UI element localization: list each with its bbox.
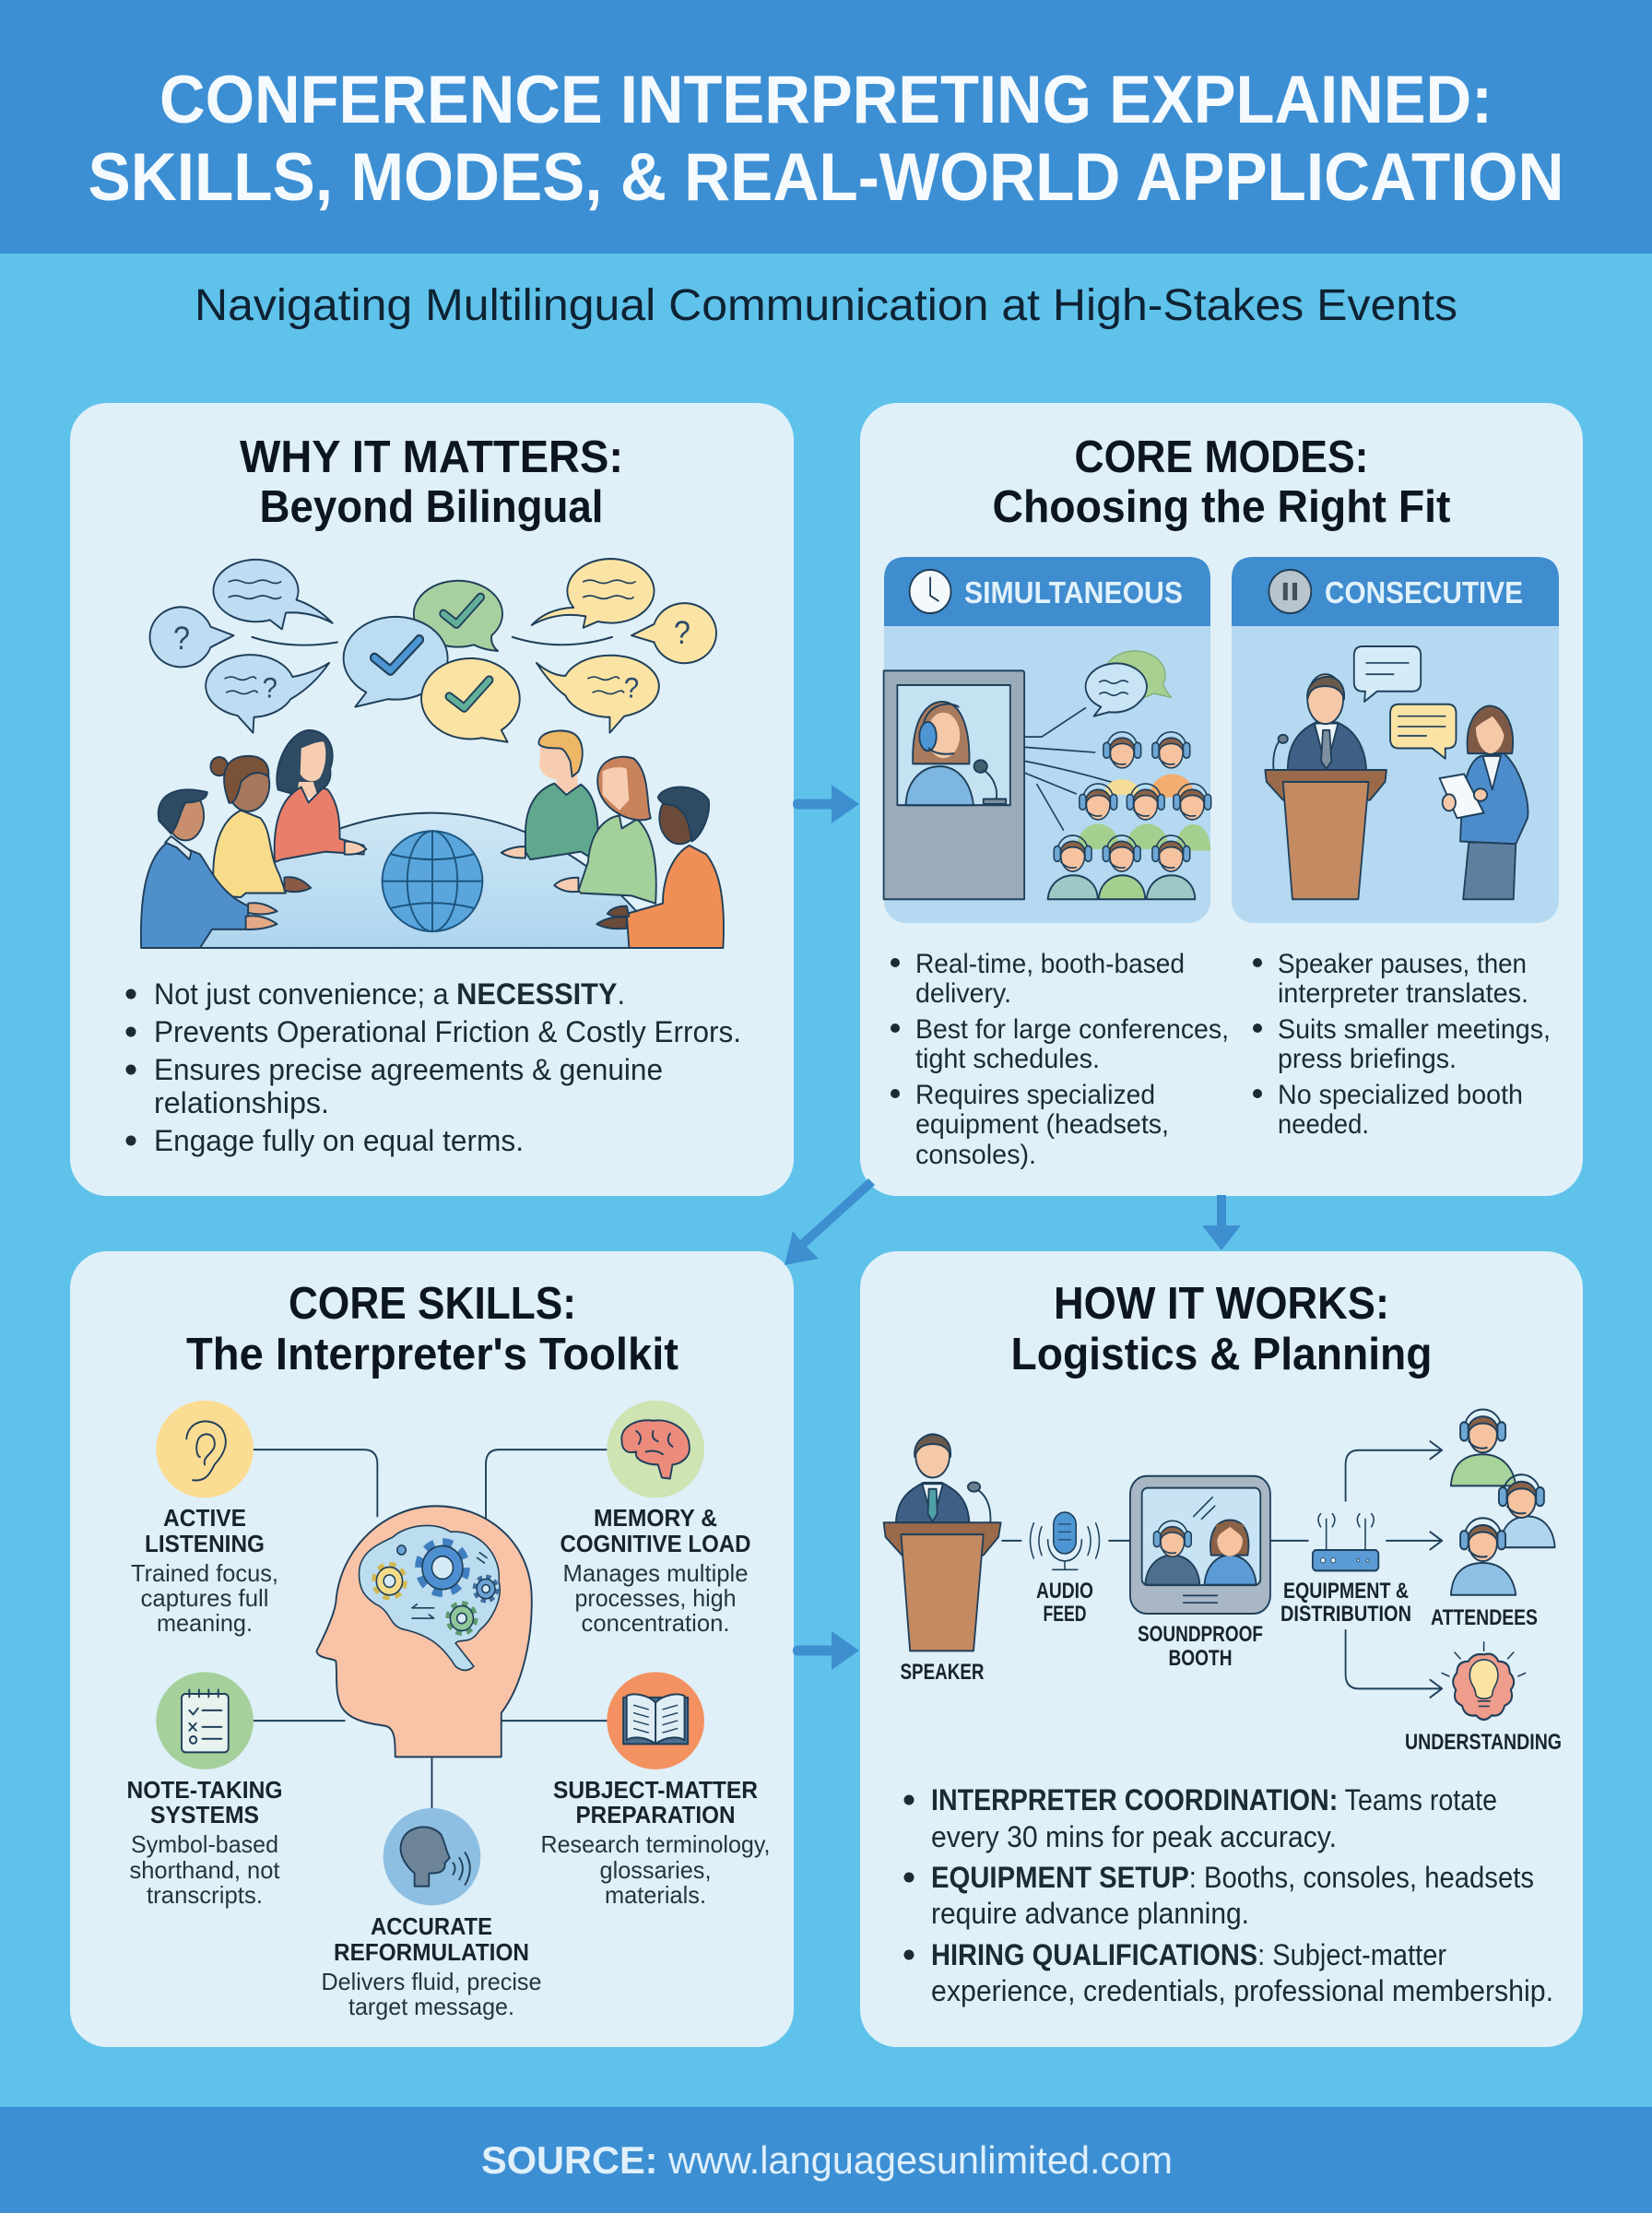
text block: why it matters bullets: Prevents Operational Friction & Costly Errors. bbox=[154, 1015, 741, 1048]
text block: consecutive bullets: Speaker pauses, then bbox=[1278, 949, 1527, 979]
icon: speaker at podium bbox=[884, 1434, 1001, 1651]
heading: why it matters: WHY IT MATTERS: bbox=[240, 432, 623, 482]
diagram: audio signal flow bbox=[884, 1410, 1555, 1720]
skill: memory and cognitive load: processes, high bbox=[575, 1584, 736, 1612]
flow labels: SOUNDPROOF bbox=[1138, 1622, 1263, 1647]
skill: active listening: Trained focus, bbox=[131, 1559, 278, 1587]
flow labels: EQUIPMENT & bbox=[1283, 1579, 1409, 1604]
skill: subject-matter preparation: glossaries, bbox=[599, 1856, 712, 1884]
text block: why it matters bullets: Ensures precise agreements & genuine bbox=[154, 1053, 663, 1086]
skill: note-taking systems: transcripts. bbox=[147, 1881, 263, 1909]
icon: understanding brain with light bulb bbox=[1442, 1642, 1525, 1720]
heading: core modes: Choosing the Right Fit bbox=[992, 482, 1451, 532]
text block: why it matters bullets bbox=[125, 977, 741, 1157]
text block: how it works bullets: INTERPRETER COORDINATION: Teams rotate bbox=[931, 1783, 1497, 1817]
heading: why it matters bbox=[240, 432, 623, 532]
skill: memory and cognitive load bbox=[560, 1504, 750, 1637]
text block: simultaneous bullets: Best for large conferences, bbox=[915, 1014, 1229, 1045]
heading: core skills bbox=[186, 1279, 678, 1379]
skill: accurate reformulation: ACCURATE bbox=[371, 1912, 492, 1940]
skill: memory and cognitive load: concentration. bbox=[581, 1609, 730, 1637]
arrow: core skills to how it works bbox=[793, 1631, 859, 1670]
skill: accurate reformulation: target message. bbox=[348, 1993, 514, 2020]
skill: subject-matter preparation: PREPARATION bbox=[575, 1801, 736, 1828]
table bbox=[200, 813, 663, 948]
panel: why it matters bbox=[70, 403, 794, 1196]
footer source bar bbox=[0, 2107, 1652, 2213]
heading: how it works: HOW IT WORKS: bbox=[1054, 1279, 1389, 1329]
illustration: diverse team around table with speech bubbles: ? bbox=[674, 616, 690, 651]
text block: why it matters bullets: relationships. bbox=[154, 1086, 329, 1119]
icon: attendees with headsets bbox=[1451, 1410, 1555, 1595]
illustration: diverse team around table with speech bubbles: ? bbox=[624, 673, 639, 704]
flow labels: BOOTH bbox=[1169, 1646, 1232, 1671]
card: simultaneous: SIMULTANEOUS bbox=[964, 575, 1183, 609]
illustration: diverse team around table with speech bubbles: ? bbox=[263, 673, 277, 704]
diagram: head with gears and skill icons bbox=[156, 1401, 704, 1905]
skill: accurate reformulation bbox=[321, 1912, 542, 2020]
heading: core modes bbox=[992, 432, 1451, 532]
card: consecutive: CONSECUTIVE bbox=[1325, 575, 1523, 609]
text block: consecutive bullets: No specialized booth bbox=[1278, 1080, 1523, 1110]
text block: simultaneous bullets: equipment (headsets, bbox=[915, 1109, 1169, 1140]
text block: consecutive bullets: press briefings. bbox=[1278, 1044, 1457, 1074]
text block: consecutive bullets: needed. bbox=[1278, 1109, 1369, 1140]
text block: simultaneous bullets: delivery. bbox=[915, 978, 1011, 1009]
text block: how it works bullets bbox=[903, 1783, 1553, 2007]
icon: router with arrows to attendees bbox=[1313, 1441, 1442, 1698]
skill: note-taking systems: SYSTEMS bbox=[150, 1801, 259, 1828]
panel: core modes bbox=[860, 403, 1583, 1196]
heading: why it matters: Beyond Bilingual bbox=[260, 482, 603, 532]
skill: active listening: LISTENING bbox=[145, 1530, 265, 1557]
icon: speech bubbles bbox=[150, 559, 716, 742]
flow labels: DISTRIBUTION bbox=[1280, 1602, 1411, 1627]
heading: core modes: CORE MODES: bbox=[1075, 432, 1368, 482]
title banner: SKILLS, MODES, & REAL-WORLD APPLICATION bbox=[88, 140, 1564, 215]
skill: memory and cognitive load: Manages multiple bbox=[562, 1559, 749, 1587]
arrow: core modes to how it works bbox=[1202, 1195, 1241, 1250]
skill: note-taking systems: NOTE-TAKING bbox=[127, 1776, 282, 1804]
skill: active listening: ACTIVE bbox=[163, 1504, 246, 1532]
panel: core skills bbox=[70, 1251, 794, 2047]
text block: simultaneous bullets bbox=[891, 949, 1229, 1170]
icon: ear bbox=[156, 1401, 254, 1497]
arrow: core modes to core skills bbox=[785, 1178, 875, 1265]
icon: note-taking checklist bbox=[156, 1672, 254, 1769]
heading: how it works bbox=[1010, 1279, 1433, 1379]
skill: subject-matter preparation: materials. bbox=[605, 1881, 706, 1909]
illustration: booth and audience with headsets bbox=[884, 570, 1211, 899]
text block: simultaneous bullets: consoles). bbox=[915, 1140, 1036, 1170]
icon: open book bbox=[607, 1672, 704, 1769]
arrow: why it matters to core modes bbox=[793, 785, 859, 823]
text block: simultaneous bullets: tight schedules. bbox=[915, 1044, 1100, 1074]
text block: how it works bullets: EQUIPMENT SETUP: Booths, consoles, headsets bbox=[931, 1861, 1534, 1894]
text block: how it works bullets: HIRING QUALIFICATIONS: Subject-matter bbox=[931, 1938, 1446, 1971]
skill: active listening: captures full bbox=[140, 1584, 269, 1612]
text block: simultaneous bullets: Real-time, booth-based bbox=[915, 949, 1185, 979]
text block: how it works bullets: require advance planning. bbox=[931, 1897, 1249, 1930]
skill: active listening: meaning. bbox=[157, 1609, 253, 1637]
icon: globe bbox=[383, 831, 482, 931]
flow labels bbox=[900, 1579, 1562, 1755]
footer source bar: SOURCE: www.languagesunlimited.com bbox=[481, 2138, 1173, 2182]
card: simultaneous bbox=[884, 557, 1211, 923]
heading: core skills: CORE SKILLS: bbox=[289, 1279, 576, 1329]
text block: simultaneous bullets: Requires specialized bbox=[915, 1080, 1155, 1110]
skill: accurate reformulation: REFORMULATION bbox=[334, 1938, 529, 1966]
icon: speaking head bbox=[384, 1808, 480, 1905]
flow labels: AUDIO bbox=[1036, 1579, 1093, 1604]
illustration: diverse team around table with speech bubbles: ? bbox=[173, 621, 190, 657]
flow labels: UNDERSTANDING bbox=[1405, 1730, 1562, 1755]
illustration: speaker at podium and interpreter bbox=[1265, 570, 1528, 899]
icon: soundproof booth bbox=[1130, 1476, 1270, 1614]
skill: note-taking systems: shorthand, not bbox=[129, 1856, 280, 1884]
people bbox=[141, 730, 724, 948]
panel: how it works bbox=[860, 1251, 1583, 2047]
text block: consecutive bullets: interpreter translates. bbox=[1278, 978, 1528, 1009]
skill: subject-matter preparation: SUBJECT-MATTER bbox=[553, 1776, 758, 1804]
title banner: CONFERENCE INTERPRETING EXPLAINED: bbox=[159, 63, 1493, 137]
title banner bbox=[0, 0, 1652, 254]
skill: memory and cognitive load: MEMORY & bbox=[594, 1504, 717, 1532]
skill: subject-matter preparation: Research terminology, bbox=[540, 1830, 771, 1858]
text block: why it matters bullets: Engage fully on equal terms. bbox=[154, 1124, 524, 1157]
text block: consecutive bullets: Suits smaller meetings, bbox=[1278, 1014, 1551, 1045]
card: consecutive bbox=[1232, 557, 1559, 923]
illustration: diverse team around table with speech bubbles bbox=[141, 559, 724, 948]
flow labels: ATTENDEES bbox=[1431, 1605, 1538, 1630]
skill: note-taking systems bbox=[127, 1776, 282, 1909]
text block: consecutive bullets bbox=[1253, 949, 1551, 1140]
icon: microphone audio feed bbox=[1002, 1512, 1308, 1569]
skill: memory and cognitive load: COGNITIVE LOAD bbox=[560, 1530, 750, 1557]
flow labels: SPEAKER bbox=[900, 1660, 985, 1685]
subtitle: Navigating Multilingual Communication at High-Stakes Events bbox=[195, 281, 1457, 330]
text block: why it matters bullets: Not just convenience; a NECESSITY. bbox=[154, 977, 625, 1011]
skill: accurate reformulation: Delivers fluid, precise bbox=[321, 1968, 542, 1995]
heading: how it works: Logistics & Planning bbox=[1010, 1330, 1433, 1379]
heading: core skills: The Interpreter's Toolkit bbox=[186, 1330, 678, 1379]
skill: active listening bbox=[131, 1504, 278, 1637]
icon: brain bbox=[607, 1401, 704, 1497]
text block: how it works bullets: experience, credentials, professional membership. bbox=[931, 1974, 1553, 2007]
icon: head with brain bbox=[316, 1506, 532, 1757]
flow labels: FEED bbox=[1044, 1602, 1086, 1627]
text block: how it works bullets: every 30 mins for peak accuracy. bbox=[931, 1820, 1337, 1853]
skill: subject-matter preparation bbox=[540, 1776, 771, 1909]
skill: note-taking systems: Symbol-based bbox=[131, 1830, 278, 1858]
